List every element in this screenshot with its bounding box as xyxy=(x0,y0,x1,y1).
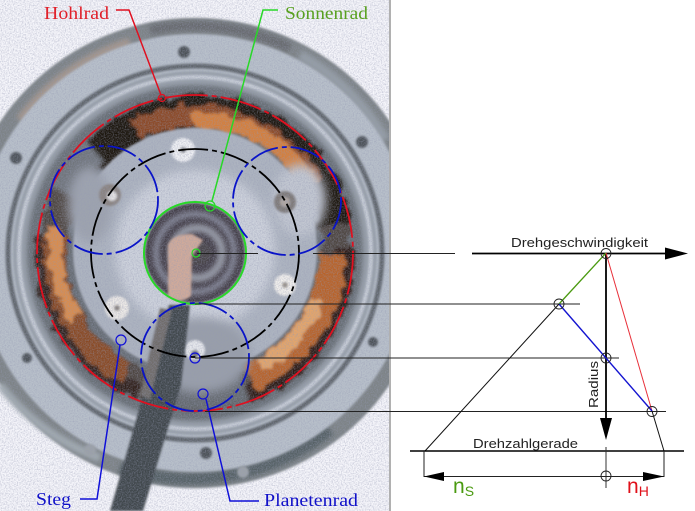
label: Hohlrad xyxy=(44,3,166,102)
node markers xyxy=(554,248,657,481)
label: Drehzahlgerade: Drehzahlgerade xyxy=(473,437,578,451)
cable sheath highlight xyxy=(140,308,172,400)
label: nS: S xyxy=(465,483,474,499)
planet gear left xyxy=(50,146,158,254)
radius axis arrow xyxy=(600,253,612,440)
lower axis mark xyxy=(605,447,607,488)
ring gear pitch circle xyxy=(37,95,353,411)
light flange ring xyxy=(0,34,414,472)
carrier bolts xyxy=(99,138,296,360)
sun gear circle xyxy=(144,202,246,304)
speed line baseline xyxy=(410,450,684,452)
velocity diagram xyxy=(410,236,688,499)
label: Planetenrad: Planetenrad xyxy=(264,490,358,510)
flange rivets xyxy=(10,46,378,478)
inner gear housing xyxy=(27,85,363,421)
tan cable end xyxy=(168,234,203,301)
speed line: sun xyxy=(559,253,606,304)
construction rays xyxy=(425,304,664,451)
panel: photo of planetary gear hub xyxy=(0,0,430,511)
planet gear right xyxy=(233,147,341,255)
label: Hohlrad: Hohlrad xyxy=(44,3,109,23)
label: Drehgeschwindigkeit: Drehgeschwindigkeit xyxy=(511,236,649,250)
divider between photo and diagram xyxy=(389,0,391,511)
speed dimension arrows xyxy=(424,451,664,481)
photo speckle texture xyxy=(0,0,389,511)
speed line: ring xyxy=(606,253,652,411)
label: nS: n xyxy=(453,475,465,498)
label: nH: n xyxy=(627,475,639,498)
projection lines from photo to diagram xyxy=(195,254,666,412)
label: Planetenrad xyxy=(198,389,358,510)
label: nH: H xyxy=(639,483,649,499)
rim wear highlights xyxy=(0,26,385,479)
label: Sonnenrad: Sonnenrad xyxy=(285,3,368,23)
label: Sonnenrad xyxy=(192,3,368,257)
carrier circle xyxy=(91,149,299,357)
inner carrier disc xyxy=(73,128,317,372)
planet gear bottom xyxy=(141,303,249,411)
label: Steg xyxy=(36,335,200,509)
speed line: planet xyxy=(559,304,652,411)
sun gear hub xyxy=(145,203,245,303)
label: Radius: Radius xyxy=(587,361,601,408)
grey gear gap at planet positions xyxy=(62,150,245,395)
black output cable xyxy=(110,305,190,511)
speed axis arrow xyxy=(472,248,688,260)
ring gear teeth band with copper xyxy=(45,111,345,395)
hub outer rim xyxy=(0,18,430,488)
label: Steg: Steg xyxy=(36,489,71,509)
